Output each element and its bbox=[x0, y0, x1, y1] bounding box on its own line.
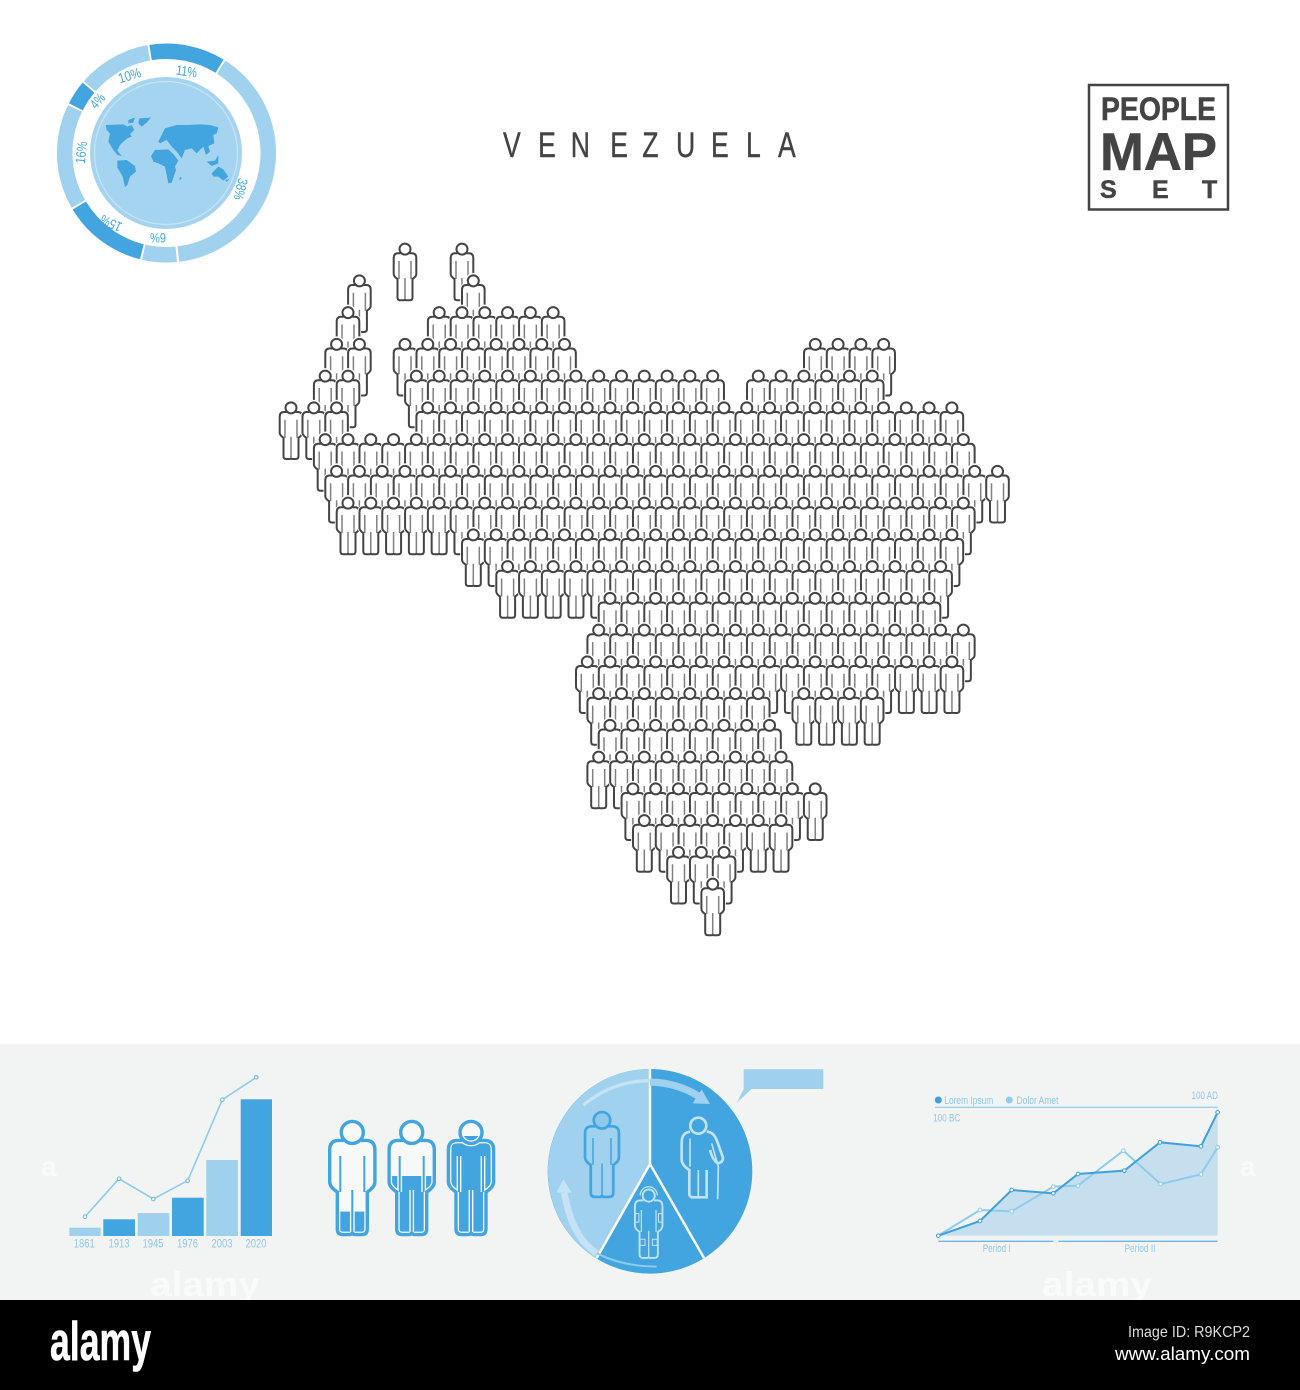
year labels: 1861 bbox=[74, 1238, 95, 1250]
donut percentage labels: 15% bbox=[98, 212, 124, 235]
adult figure bbox=[585, 1112, 619, 1197]
people map of Venezuela bbox=[280, 244, 1009, 935]
figure: high fill bbox=[445, 1120, 497, 1238]
watermark fragments: alamy bbox=[150, 1266, 260, 1304]
bottom infographic band bbox=[0, 1044, 1300, 1300]
trend line bbox=[83, 1076, 258, 1218]
donut percentage labels: 6% bbox=[150, 230, 166, 246]
year labels bbox=[74, 1238, 266, 1250]
watermark fragments: a bbox=[41, 1151, 57, 1182]
chart legend: Lorem Ipsum bbox=[944, 1095, 993, 1107]
cycle arrows bbox=[557, 1081, 710, 1267]
donut percentage labels: 4% bbox=[86, 90, 108, 112]
axis labels: 100 AD bbox=[1192, 1090, 1218, 1102]
elderly figure with cane bbox=[682, 1118, 723, 1199]
empty callout box bbox=[737, 1069, 823, 1103]
axis labels: Period I bbox=[983, 1243, 1011, 1255]
year labels: 1976 bbox=[177, 1238, 198, 1250]
watermark fragments: alamy bbox=[1042, 1266, 1152, 1304]
badge: people map set bbox=[1089, 85, 1228, 210]
donut percentage labels: 10% bbox=[116, 64, 143, 86]
watermark fragments: a bbox=[1240, 1151, 1256, 1182]
bars bbox=[69, 1099, 272, 1236]
black footer bar bbox=[0, 1300, 1300, 1390]
bar chart with trend line bbox=[69, 1076, 272, 1250]
donut percentage labels: 16% bbox=[72, 141, 90, 164]
axis labels: Period II bbox=[1124, 1243, 1156, 1255]
three people fill-level icons bbox=[326, 1120, 497, 1238]
badge: people map set: MAP bbox=[1100, 123, 1217, 182]
age pie chart bbox=[548, 1069, 752, 1274]
year labels: 1945 bbox=[142, 1238, 164, 1250]
donut percentage labels: 38% bbox=[230, 177, 251, 202]
alamy logo: alamy bbox=[50, 1310, 151, 1372]
donut percentage labels bbox=[72, 62, 251, 246]
line chart panel bbox=[933, 1090, 1219, 1255]
pie segments bbox=[548, 1069, 752, 1274]
figure: low fill bbox=[326, 1120, 378, 1238]
watermark fragments bbox=[41, 1151, 1256, 1304]
donut percentage labels: 11% bbox=[175, 62, 198, 80]
title: VENEZUELA bbox=[503, 125, 796, 165]
year labels: 2003 bbox=[212, 1238, 232, 1250]
child figure with headphones bbox=[635, 1187, 662, 1258]
globe disc bbox=[90, 77, 242, 229]
figure: medium fill bbox=[386, 1120, 438, 1238]
chart plot bbox=[935, 1107, 1219, 1241]
website: www.alamy.com bbox=[1114, 1344, 1250, 1364]
world map continents bbox=[106, 117, 229, 187]
chart legend: Dolor Amet bbox=[1016, 1095, 1058, 1107]
donut ring segments bbox=[23, 9, 310, 297]
axis labels bbox=[933, 1090, 1218, 1255]
year labels: 2020 bbox=[246, 1238, 266, 1250]
year labels: 1913 bbox=[108, 1238, 130, 1250]
chart legend bbox=[935, 1095, 1058, 1107]
badge: people map set: SET bbox=[1100, 176, 1217, 204]
donut chart with world map bbox=[23, 9, 310, 297]
badge: people map set: PEOPLE bbox=[1101, 91, 1216, 127]
image id: Image ID: R9KCP2 bbox=[1128, 1324, 1250, 1341]
axis labels: 100 BC bbox=[933, 1112, 960, 1124]
